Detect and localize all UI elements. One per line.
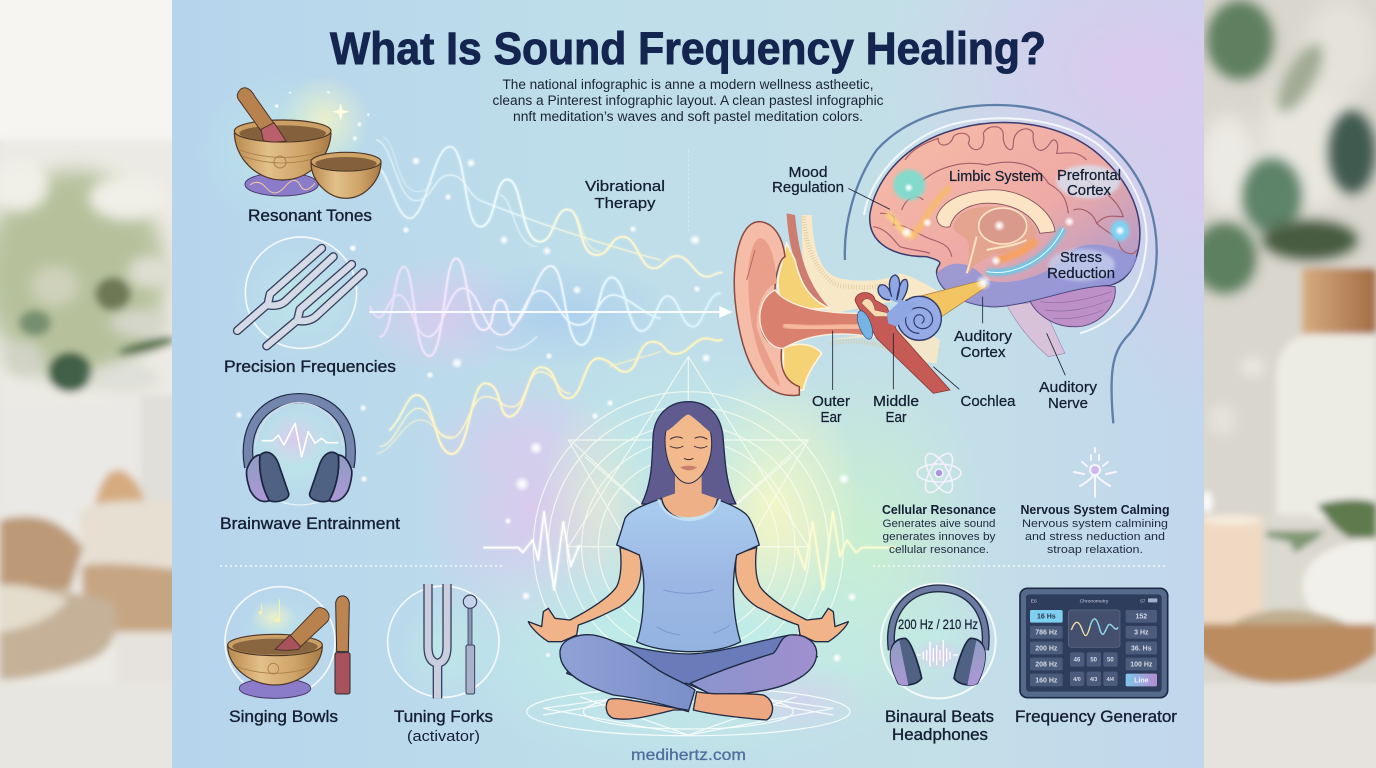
legs (560, 635, 817, 720)
device header: E6 (1031, 599, 1037, 605)
Outer Ear: Ear (820, 409, 842, 426)
device header: Chronometry (1080, 598, 1109, 604)
large bowl (234, 133, 331, 180)
label: Resonant Tones: Resonant Tones (248, 207, 372, 225)
face (665, 414, 712, 483)
icon: frequency generator device (1020, 588, 1168, 698)
Prefrontal Cortex: Prefrontal (1057, 167, 1121, 184)
upright mallet (335, 596, 350, 694)
mallet (237, 88, 286, 142)
Stress Reduction: Stress (1060, 249, 1102, 266)
Limbic System: Limbic System (949, 168, 1043, 185)
right keys: 152 (1136, 614, 1147, 621)
Cochlea: Cochlea (960, 393, 1016, 410)
arrow into the ear (370, 306, 733, 318)
right keys: 36. Hs (1131, 645, 1152, 652)
Outer Ear (812, 393, 850, 426)
lower wave: brainwave entrainment (377, 338, 722, 454)
bowl (228, 647, 322, 685)
middle wave: precision frequencies (370, 258, 720, 356)
sacred geometry mandala (533, 357, 843, 702)
vibrational therapy label: Therapy (594, 195, 656, 212)
diagram: ear and brain (734, 105, 1157, 423)
centre keys: 4/4 (1107, 677, 1114, 683)
label: binaural beats headphones (885, 708, 994, 744)
icon: tuning forks top (237, 237, 363, 348)
Auditory Nerve: Nerve (1048, 395, 1088, 412)
intro text: cleans a Pinterest infographic layout. A clean pastesl infographic (492, 93, 884, 108)
Auditory Cortex: Cortex (960, 344, 1006, 361)
right keys: Line (1134, 677, 1149, 684)
label: tuning forks: Tuning Forks (394, 708, 493, 726)
t-shirt (617, 498, 759, 652)
headband (248, 398, 351, 467)
cerebellum (1028, 286, 1115, 327)
striker in bowl (275, 608, 329, 650)
left keys: 200 Hz (1035, 645, 1058, 652)
icon: binaural headphones (881, 584, 996, 698)
hz label: 200 Hz / 210 Hz (898, 616, 978, 632)
Stress Reduction (1047, 249, 1115, 282)
intro text: nnft meditation’s waves and soft pastel meditation colors. (513, 109, 863, 124)
Auditory Nerve (1039, 379, 1098, 412)
main infographic panel (172, 0, 1204, 768)
fork two (267, 264, 363, 346)
auditory nerve to brain (905, 280, 987, 317)
music notes (262, 599, 279, 620)
small bowl (311, 163, 381, 198)
sparkles (235, 156, 857, 663)
ear and brain labels (772, 164, 1121, 426)
brainwave (262, 423, 338, 457)
label: cellular resonance: Generates aive sound (882, 518, 996, 530)
leader lines (833, 188, 1065, 390)
floor mandala (527, 688, 850, 736)
label: nervous system calming: Nervous system calmining (1022, 518, 1168, 530)
label: nervous system calming: Nervous System Calming (1020, 503, 1170, 517)
inner ear cochlea (878, 275, 941, 340)
meditating woman (528, 402, 848, 720)
right keys (1126, 610, 1157, 686)
label: cellular resonance: generates innoves by (882, 531, 996, 543)
centre keys: 46 (1074, 658, 1081, 664)
right keys: 3 Hz (1134, 630, 1149, 637)
right photo background (1204, 0, 1376, 688)
eardrum (854, 309, 876, 341)
limbic structure (937, 190, 1055, 273)
soft halo behind brain labels (1048, 165, 1120, 281)
arms (528, 547, 848, 642)
label: cellular resonance: Cellular Resonance (882, 503, 996, 517)
Mood Regulation (772, 164, 844, 196)
centre keys: 4/0 (1073, 677, 1081, 683)
left keys: 160 Hz (1035, 677, 1058, 684)
icon: tuning fork bottom (388, 584, 499, 698)
Prefrontal Cortex (1057, 167, 1121, 199)
label: cellular resonance: cellular resonance. (889, 544, 989, 556)
brain stem (1007, 302, 1065, 357)
label: singing bowls: Singing Bowls (229, 708, 338, 726)
brain (870, 123, 1140, 307)
purple cushion (245, 173, 318, 196)
eustachian tube (855, 292, 950, 393)
label: nervous system calming (1020, 503, 1170, 556)
left photo background (0, 0, 172, 684)
teal and blue highlight areas (887, 170, 1129, 273)
Auditory Nerve: Auditory (1039, 379, 1098, 396)
label: nervous system calming: stroap relaxation. (1047, 544, 1143, 556)
vibrational therapy label: Vibrational (585, 178, 665, 195)
intro text: The national infographic is anne a modern wellness astheetic, (502, 77, 874, 92)
intro text (492, 77, 884, 124)
upper wave: resonant tones (370, 137, 722, 277)
device header (1031, 598, 1157, 605)
fork one (237, 248, 333, 331)
Middle Ear: Ear (886, 409, 907, 426)
device header: S7 (1140, 598, 1146, 603)
icon: headphones left (245, 395, 355, 505)
left keys: 786 Hz (1035, 630, 1058, 637)
icon: singing bowls top (234, 88, 381, 198)
dotted guide (687, 150, 690, 233)
label: frequency generator: Frequency Generator (1015, 708, 1178, 726)
Auditory Cortex (954, 328, 1013, 361)
head outline (845, 105, 1157, 423)
label: tuning forks: (activator) (407, 728, 480, 745)
title: What Is Sound Frequency Healing? (330, 23, 1046, 74)
footer website: medihertz.com (631, 747, 746, 764)
pulse waves around the figure (483, 512, 897, 590)
Stress Reduction: Reduction (1047, 265, 1115, 282)
yellow cartilage (778, 243, 830, 310)
icon: atom (917, 449, 961, 497)
vibrational therapy label (585, 178, 665, 212)
neck (658, 473, 719, 517)
label: binaural beats headphones: Headphones (892, 726, 988, 744)
Outer Ear: Outer (812, 393, 850, 410)
centre keys: 4/3 (1090, 677, 1097, 683)
Mood Regulation: Regulation (772, 179, 844, 196)
label: cellular resonance (882, 503, 996, 556)
label: tuning forks (394, 708, 493, 745)
sound waves flowing toward the ear (370, 137, 733, 454)
Prefrontal Cortex: Cortex (1067, 182, 1111, 199)
icon: nervous system (1074, 448, 1116, 497)
Mood Regulation: Mood (788, 164, 828, 181)
red stripe above canal (787, 213, 830, 308)
centre keys (1070, 652, 1118, 686)
left keys: 208 Hz (1035, 661, 1058, 668)
Middle Ear (873, 393, 919, 426)
right ear cup (310, 452, 352, 502)
dotted dividers (220, 565, 1165, 567)
label: Brainwave Entrainment: Brainwave Entrainment (220, 515, 400, 533)
star sparkle (332, 103, 349, 121)
right keys: 100 Hz (1130, 661, 1153, 668)
label: Precision Frequencies: Precision Frequencies (224, 358, 396, 376)
waveform screen (1068, 610, 1120, 647)
left keys (1030, 610, 1063, 686)
centre keys: 50 (1090, 658, 1098, 664)
label: nervous system calming: and stress neduction and (1025, 531, 1165, 543)
pinna outer ear (734, 222, 799, 395)
label: binaural beats headphones: Binaural Beats (885, 708, 994, 726)
Auditory Cortex: Auditory (954, 328, 1013, 345)
fork (428, 584, 447, 698)
left keys: 16 Hs (1037, 614, 1056, 621)
icon: singing bowl bottom (225, 587, 350, 698)
left ear cup (246, 452, 289, 502)
small hammer (463, 595, 477, 694)
centre keys: 50 (1107, 658, 1114, 664)
ear canal (760, 290, 873, 348)
Middle Ear: Middle (873, 393, 919, 410)
hair (642, 402, 736, 504)
cushion (239, 678, 311, 698)
temporal bone (802, 215, 950, 363)
